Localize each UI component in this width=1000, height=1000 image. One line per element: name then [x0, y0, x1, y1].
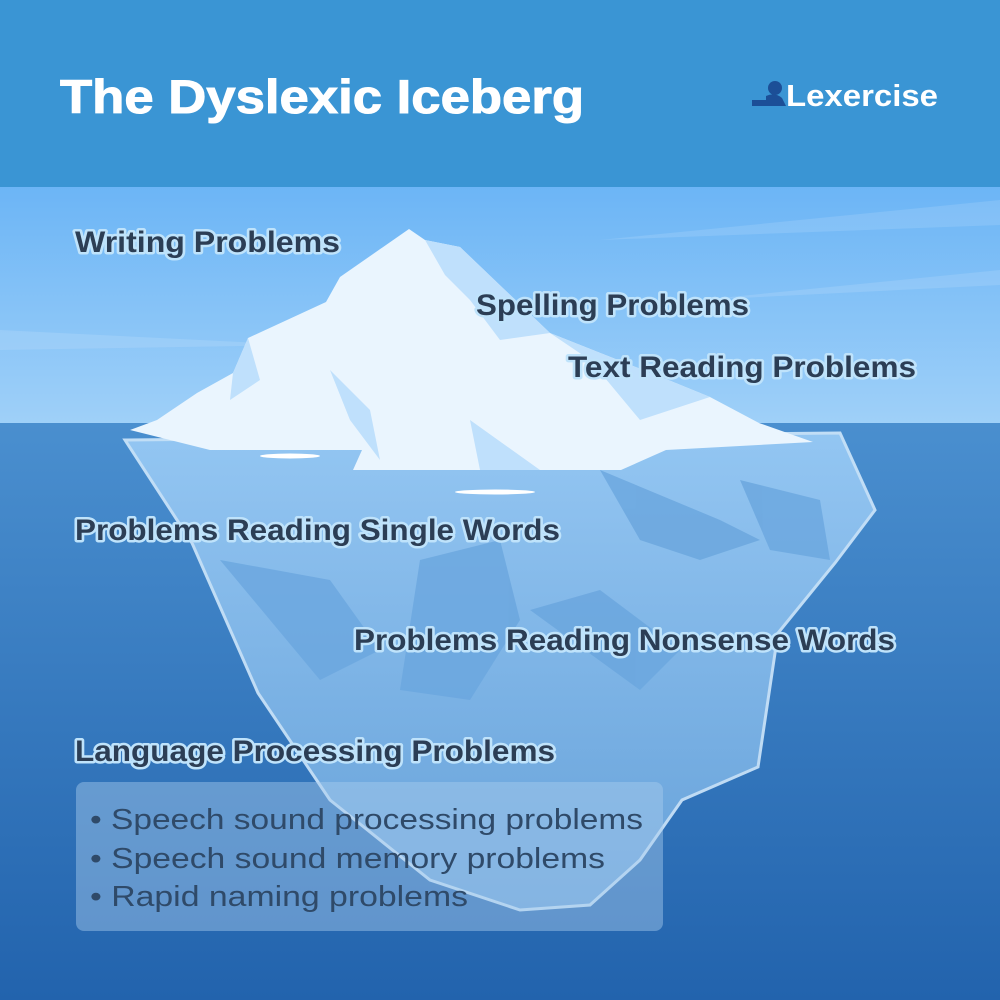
header [0, 0, 1000, 187]
label: writing problems: Writing Problems [75, 226, 340, 259]
labels [75, 226, 916, 768]
iceberg underwater [125, 433, 875, 910]
panel: language processing list: • Rapid naming problems [90, 881, 468, 913]
panel: language processing list [76, 782, 663, 931]
iceberg above water [130, 229, 813, 494]
logo: Lexercise: Lexercise [786, 78, 938, 113]
icon: child reading [752, 81, 786, 106]
sky [0, 187, 1000, 424]
label: nonsense words: Problems Reading Nonsense Words [354, 624, 895, 657]
sea [0, 423, 1000, 1000]
label: language processing: Language Processing Problems [75, 735, 555, 768]
label: single words: Problems Reading Single Words [75, 514, 560, 547]
label: text reading problems: Text Reading Problems [568, 351, 916, 384]
label: spelling problems: Spelling Problems [476, 289, 749, 322]
title: The Dyslexic Iceberg [60, 70, 584, 123]
panel: language processing list: • Speech sound memory problems [90, 843, 605, 875]
panel: language processing list: • Speech sound processing problems [90, 804, 643, 836]
